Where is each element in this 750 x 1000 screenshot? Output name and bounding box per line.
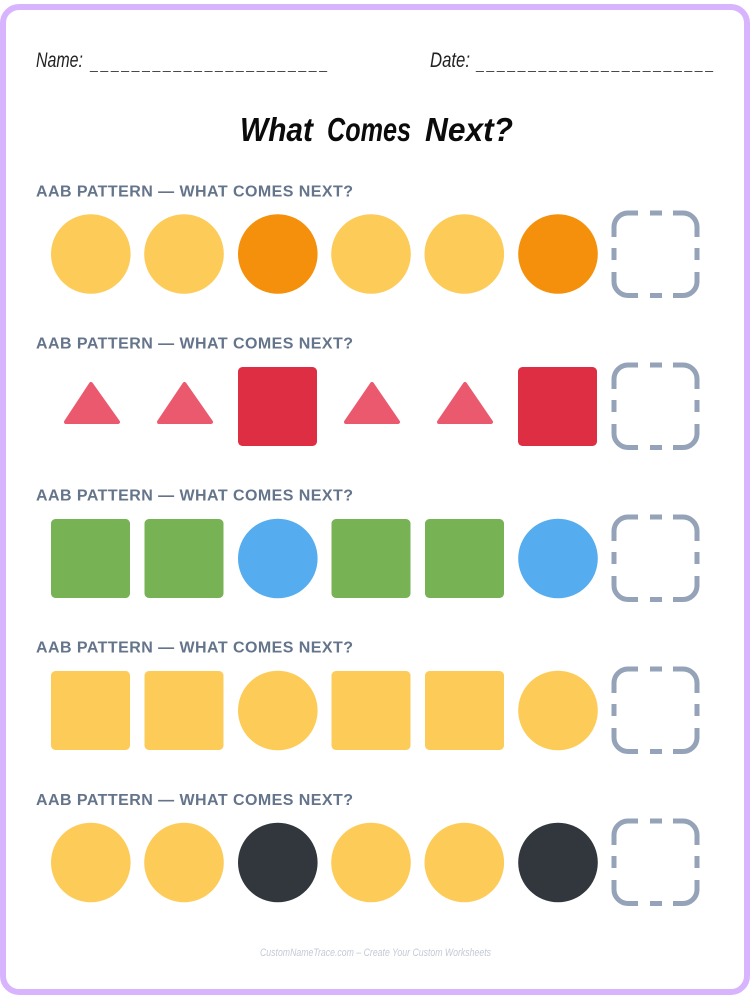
row 5 label: AAB PATTERN — WHAT COMES NEXT? <box>36 792 353 809</box>
row 4 shapes <box>51 671 598 750</box>
row 3 label: AAB PATTERN — WHAT COMES NEXT? <box>36 488 353 504</box>
row 4: yellow square square circle <box>36 640 697 752</box>
row 1 shapes <box>51 214 598 294</box>
row 5 shapes <box>51 823 598 902</box>
date field <box>430 49 713 72</box>
row 4 answer box <box>614 669 697 752</box>
name field <box>36 49 327 72</box>
row 3 answer box <box>614 517 697 600</box>
row 2 label: AAB PATTERN — WHAT COMES NEXT? <box>36 336 353 352</box>
title: What <box>240 111 315 148</box>
date field: _______________________ <box>475 56 713 72</box>
row 4 label: AAB PATTERN — WHAT COMES NEXT? <box>36 640 353 656</box>
row 1: yellow yellow orange circles <box>36 184 697 296</box>
date field: Date: <box>430 49 470 72</box>
row 3: green green blue <box>36 488 697 600</box>
row 2 shapes <box>66 367 597 446</box>
title: Comes <box>327 111 411 148</box>
row 5 answer box <box>614 821 697 904</box>
name field: Name: <box>36 49 83 72</box>
row 2: triangle triangle square <box>36 336 697 448</box>
row 5: yellow yellow black circles <box>36 792 697 904</box>
row 1 answer box <box>614 213 697 296</box>
row 1 label: AAB PATTERN — WHAT COMES NEXT? <box>36 184 353 200</box>
row 2 answer box <box>614 365 697 448</box>
title <box>240 111 513 148</box>
footer: CustomNameTrace.com – Create Your Custom Worksheets <box>260 947 491 959</box>
name field: _______________________ <box>89 56 327 72</box>
title: Next? <box>425 111 513 148</box>
row 3 shapes <box>51 519 598 598</box>
